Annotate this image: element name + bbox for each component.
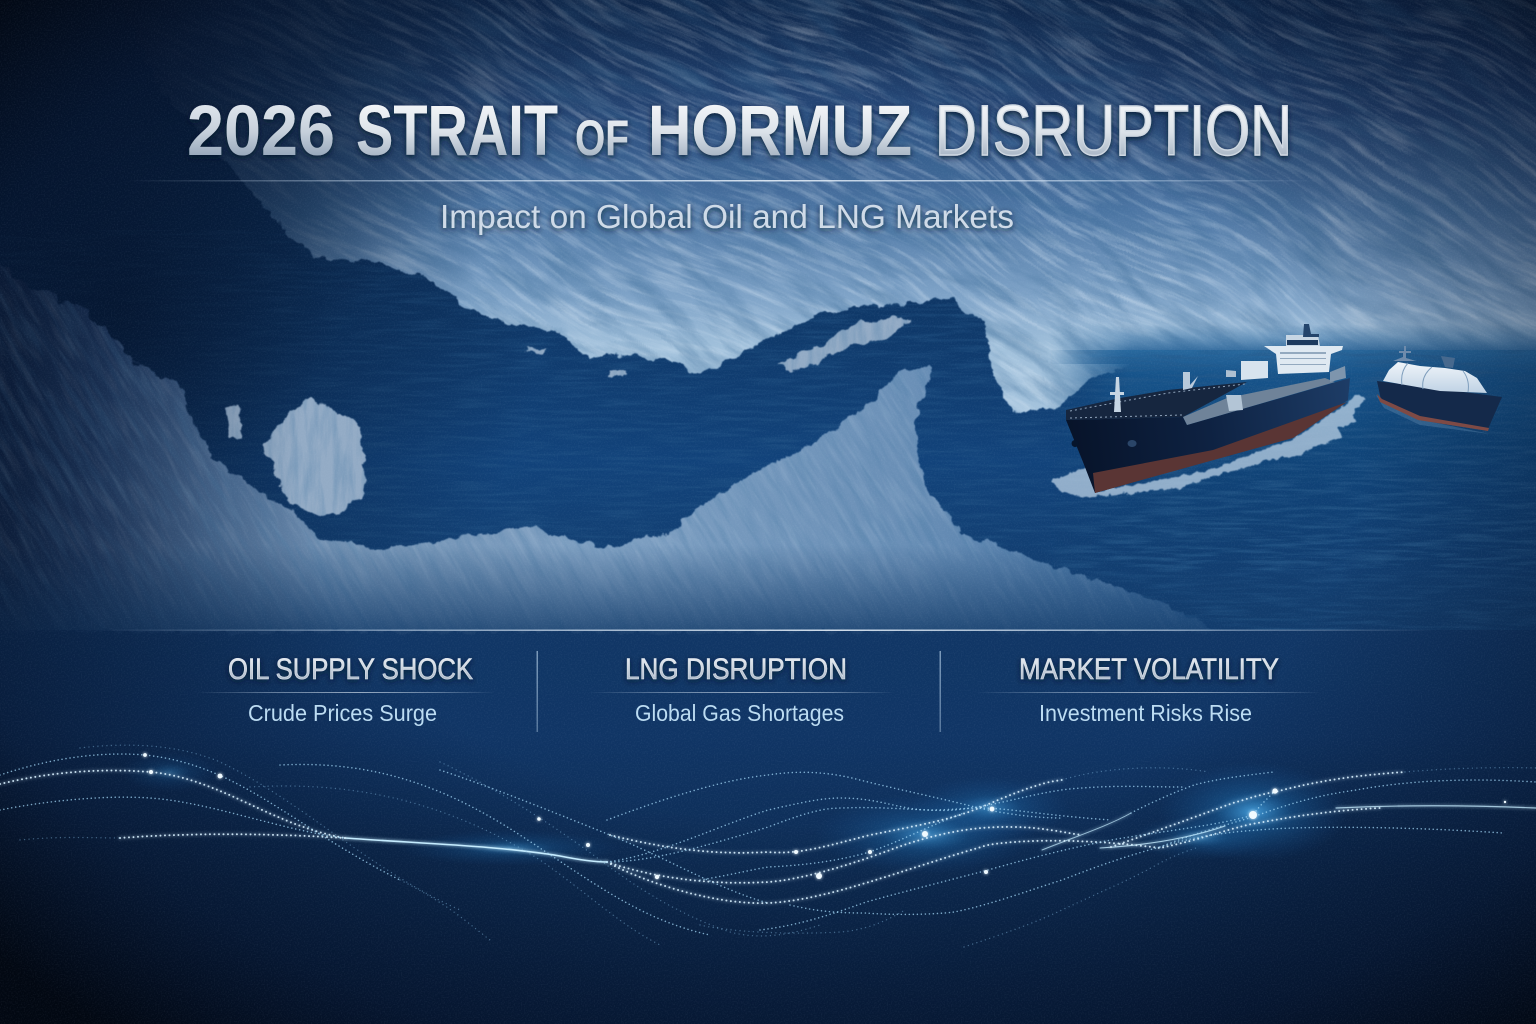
lower band backing <box>0 630 1536 1024</box>
heading: market volatility: MARKET VOLATILITY <box>1019 653 1279 686</box>
data-flow light waves <box>0 745 1536 947</box>
tanker wake foam <box>1050 394 1366 497</box>
sparkle points <box>143 753 1506 879</box>
open sea behind the ships <box>1040 350 1536 570</box>
tanker forward house <box>1241 361 1268 380</box>
solid bright beam <box>345 806 1536 862</box>
subtext: global gas shortages: Global Gas Shortages <box>635 700 844 726</box>
gulf shadow toward the west <box>0 0 700 740</box>
panel: lng disruption <box>588 653 895 726</box>
sea ripple texture <box>0 230 1536 630</box>
LNG mast and bridge <box>1393 346 1416 361</box>
tanker hull <box>1066 378 1350 493</box>
medium dotted strands <box>0 754 1536 935</box>
title: DISRUPTION <box>935 92 1292 171</box>
title <box>187 92 1292 171</box>
subtext: crude prices surge: Crude Prices Surge <box>248 700 437 726</box>
subtitle: Impact on Global Oil and LNG Markets <box>440 198 1014 235</box>
LNG hull <box>1377 381 1502 429</box>
illustration: LNG carrier <box>1376 346 1502 434</box>
tanker red boot-top <box>1093 402 1347 493</box>
map: southern peninsula land mass <box>0 266 1206 635</box>
faint dotted strands <box>20 745 1536 947</box>
title: STRAIT <box>356 92 558 171</box>
map: northern coastline land mass <box>188 0 1536 414</box>
panel: oil supply shock <box>197 653 495 726</box>
section rule <box>95 630 1435 631</box>
heading: oil supply shock: OIL SUPPLY SHOCK <box>228 653 473 686</box>
tanker deck piping <box>1066 382 1247 420</box>
title: OF <box>575 110 629 166</box>
panel: market volatility <box>975 653 1320 726</box>
LNG dome tanks <box>1383 362 1487 393</box>
map: islands <box>224 314 912 517</box>
LNG red stripe <box>1377 394 1489 431</box>
glow hotspots <box>120 752 1348 874</box>
title: 2026 <box>187 92 335 171</box>
tanker pale deck <box>1183 378 1335 425</box>
tanker superstructure <box>1264 346 1343 374</box>
subtext: investment risks rise: Investment Risks Rise <box>1039 700 1252 726</box>
tanker bow mast <box>1110 377 1124 412</box>
heading: lng disruption: LNG DISRUPTION <box>625 653 847 686</box>
title: HORMUZ <box>648 92 912 171</box>
title rule <box>125 180 1315 182</box>
LNG wake <box>1376 395 1490 434</box>
bright dotted strands <box>0 770 1405 903</box>
illustration: oil tanker with wake <box>1050 324 1366 497</box>
